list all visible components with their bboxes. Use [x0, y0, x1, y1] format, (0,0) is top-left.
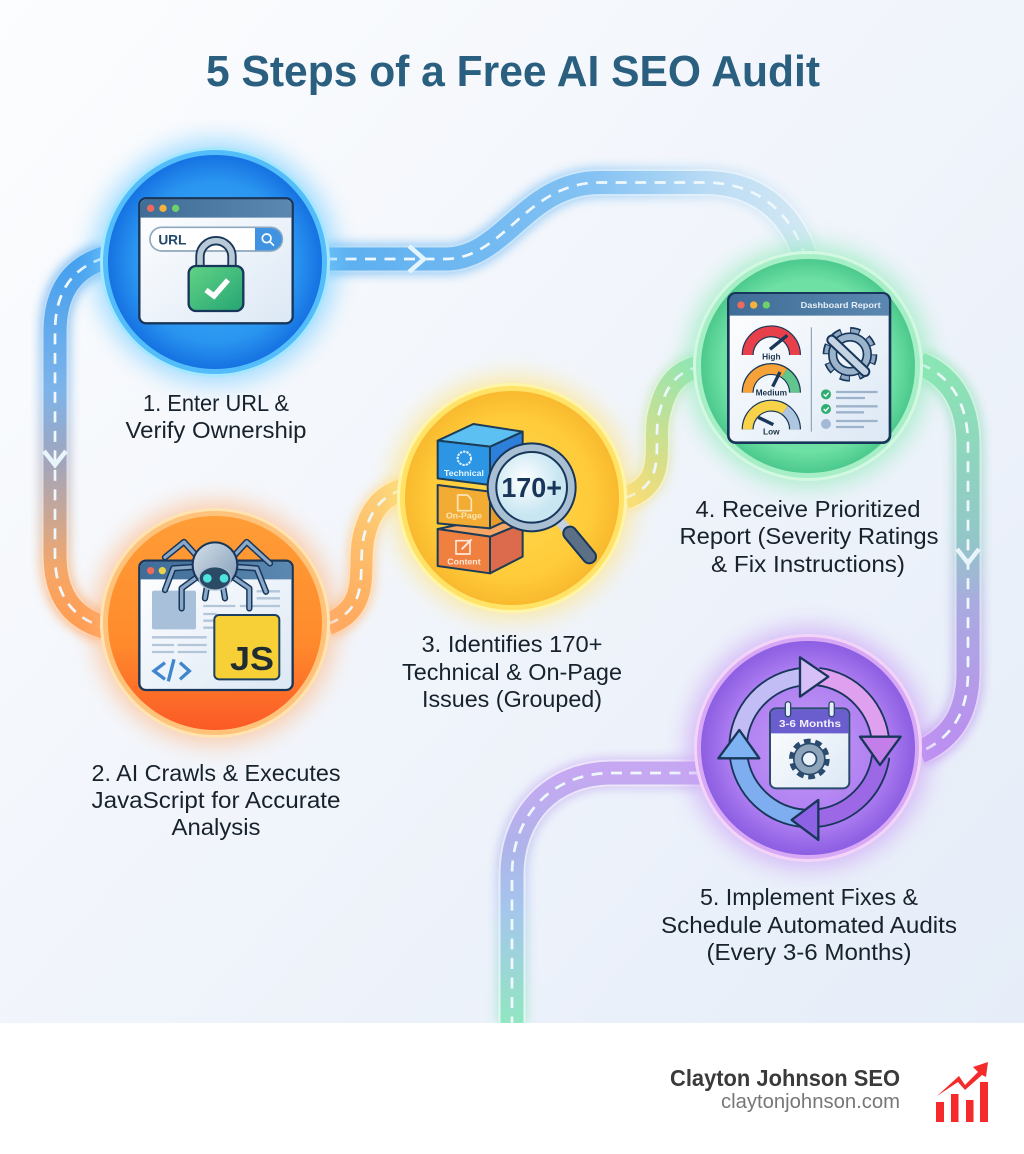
road: step 4 to step 5 — [920, 364, 968, 752]
label: step 1 — [126, 390, 306, 443]
chart: severity gauges — [748, 331, 795, 429]
label: step 5: 5. Implement Fixes & — [700, 884, 918, 910]
panel: step 5 schedule — [687, 627, 929, 869]
icon: dashboard report window: Dashboard Report — [801, 300, 881, 310]
label: step 3 — [402, 631, 622, 712]
arrow: chevron on road 2 — [44, 451, 66, 465]
label: step 5 — [661, 884, 957, 965]
road: step 3 to step 4 — [625, 367, 698, 498]
road: step 5 to footer — [512, 773, 700, 1023]
icon: dashboard report window — [728, 293, 890, 443]
icon: stacked issue blocks and magnifier: 170+ — [501, 472, 562, 503]
label: step 5: (Every 3-6 Months) — [706, 939, 912, 965]
panel: step 2 AI crawl — [94, 502, 336, 744]
footer brand name: Clayton Johnson SEO — [670, 1065, 900, 1091]
panel: step 4 report — [687, 245, 929, 487]
label: step 2: JavaScript for Accurate — [92, 787, 340, 813]
label: step 1: 1. Enter URL & — [143, 390, 289, 416]
panel: footer — [0, 1023, 1024, 1154]
label: step 4: 4. Receive Prioritized — [696, 496, 920, 522]
icon: calendar gear — [791, 741, 827, 777]
label: step 5: Schedule Automated Audits — [661, 912, 957, 938]
icon: cycle arrows with calendar — [718, 657, 901, 840]
panel: step 3 identifies issues — [391, 377, 633, 619]
icon: red growth chart logo — [936, 1062, 988, 1122]
label: step 2: 2. AI Crawls & Executes — [92, 760, 340, 786]
icon: browser with URL bar and padlock: URL — [158, 232, 186, 247]
label: step 4: & Fix Instructions) — [711, 551, 905, 577]
label: step 2 — [92, 760, 340, 840]
icon: gear and wrench — [827, 332, 873, 377]
label: step 2: Analysis — [172, 814, 260, 840]
icon: dashboard report window: High — [762, 351, 781, 361]
icon: stacked issue blocks and magnifier: On-Page — [446, 512, 483, 521]
icon: browser with JS badge — [139, 542, 293, 690]
label: step 3: Technical & On-Page — [402, 659, 622, 685]
label: step 4: Report (Severity Ratings — [680, 523, 938, 549]
icon: robot spider — [165, 542, 270, 608]
road: step 1 to step 4 — [326, 182, 805, 259]
icon: stacked issue blocks and magnifier — [438, 424, 589, 573]
label: step 3: 3. Identifies 170+ — [422, 631, 602, 657]
label: step 3: Issues (Grouped) — [422, 686, 602, 712]
icon: stacked issue blocks and magnifier: Technical — [444, 468, 484, 478]
icon: browser with URL bar and padlock — [139, 198, 293, 323]
panel: step 1 enter URL — [93, 140, 337, 384]
icon: browser with JS badge: JS — [230, 641, 274, 678]
icon: stacked issue blocks and magnifier: Content — [447, 556, 481, 566]
title: 5 Steps of a Free AI SEO Audit — [206, 47, 820, 96]
arrow: chevron on road 1 — [409, 246, 424, 272]
icon: dashboard report window: Medium — [756, 388, 787, 398]
road: step 1 to step 2 — [55, 258, 104, 627]
icon: dashboard report window: Low — [763, 427, 780, 437]
label: step 1: Verify Ownership — [126, 417, 306, 443]
arrow: chevron on road 5 — [957, 549, 979, 563]
footer website: claytonjohnson.com — [721, 1091, 900, 1113]
label: step 4 — [680, 496, 938, 577]
icon: cycle arrows with calendar: 3-6 Months — [779, 719, 841, 730]
road: step 2 to step 3 — [328, 490, 402, 624]
